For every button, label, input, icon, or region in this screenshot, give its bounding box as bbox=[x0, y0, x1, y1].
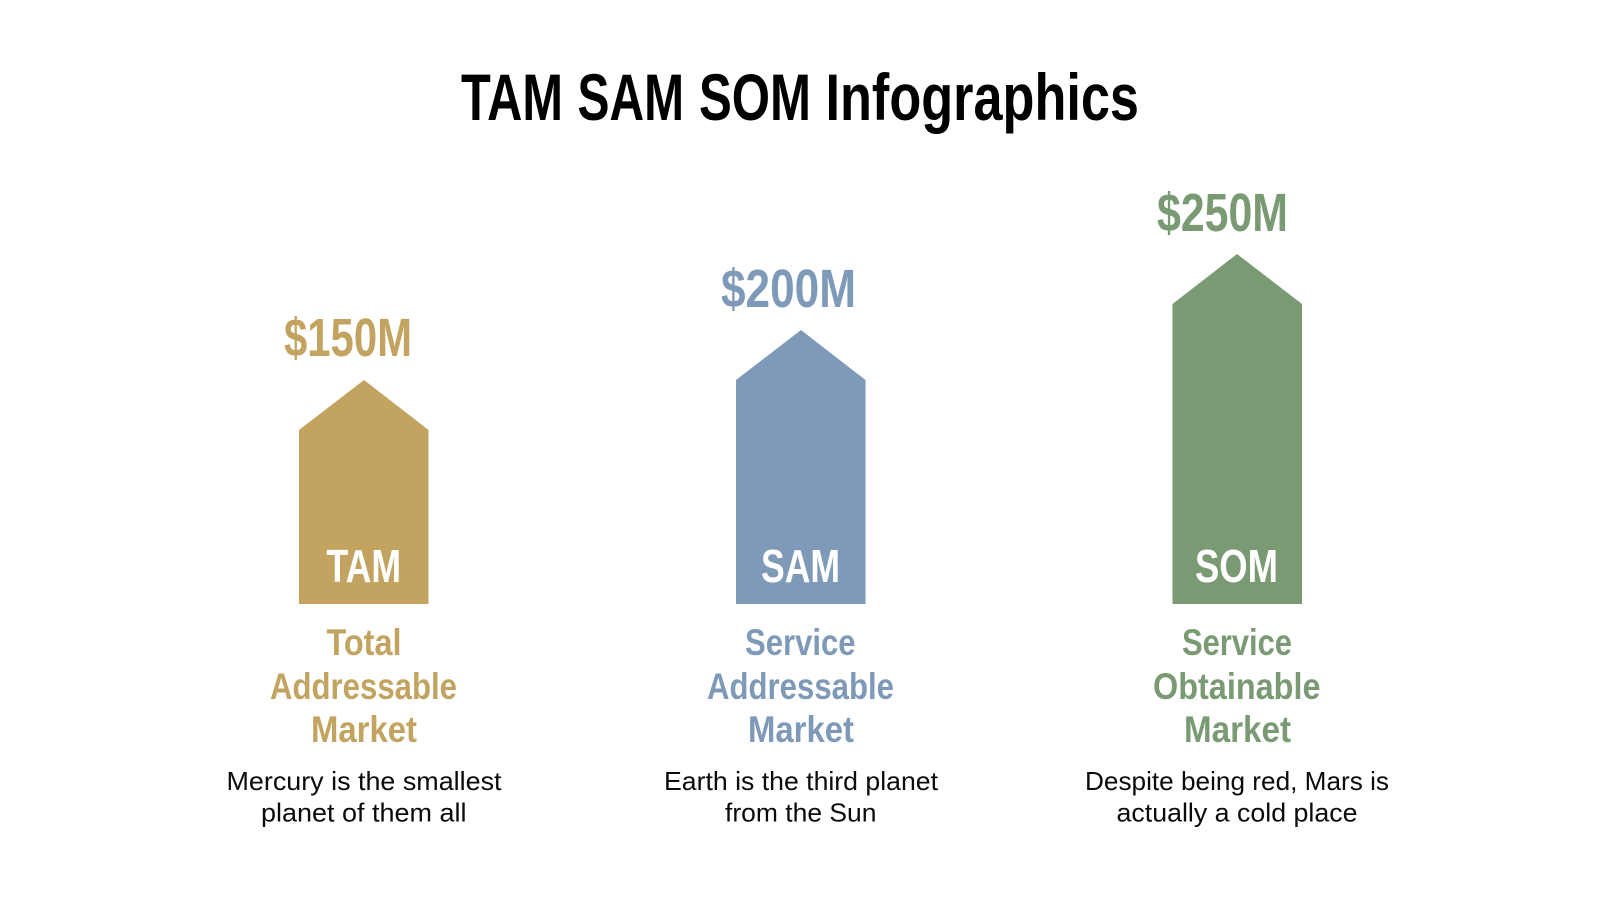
description: SOM: Despite being red, Mars is bbox=[1085, 766, 1389, 796]
bar label: TAM: TAM bbox=[326, 540, 401, 592]
description: TAM: planet of them all bbox=[261, 798, 466, 828]
heading: Service Addressable Market bbox=[707, 622, 894, 750]
title: SOM bbox=[699, 60, 811, 134]
heading: Service Obtainable Market: Market bbox=[1184, 709, 1291, 750]
heading: Service Addressable Market: Service bbox=[745, 622, 856, 663]
title: TAM bbox=[461, 60, 563, 134]
panel: TAM bbox=[226, 308, 502, 828]
arrow bar: SOM bbox=[1172, 254, 1302, 604]
bar label: SOM: SOM bbox=[1195, 540, 1278, 592]
panel: SOM bbox=[1085, 183, 1389, 828]
heading: Total Addressable Market bbox=[270, 622, 457, 750]
panel: SAM bbox=[664, 259, 939, 828]
heading: Service Addressable Market: Addressable bbox=[707, 666, 894, 707]
heading: Service Addressable Market: Market bbox=[748, 709, 854, 750]
value: $250M: $250M bbox=[1157, 183, 1288, 243]
heading: Total Addressable Market: Addressable bbox=[270, 666, 457, 707]
arrow bar: TAM bbox=[299, 380, 428, 604]
heading: Service Obtainable Market bbox=[1153, 622, 1320, 750]
description: SOM bbox=[1085, 766, 1389, 828]
title: SAM bbox=[578, 60, 684, 134]
title bbox=[461, 60, 1139, 134]
heading: Service Obtainable Market: Service bbox=[1182, 622, 1292, 663]
value: $150M: $150M bbox=[284, 308, 412, 368]
heading: Total Addressable Market: Market bbox=[311, 709, 417, 750]
arrow bar: SAM bbox=[736, 330, 866, 604]
description: TAM bbox=[226, 766, 502, 828]
description: SOM: actually a cold place bbox=[1116, 798, 1358, 828]
description: SAM bbox=[664, 766, 939, 828]
description: SAM: Earth is the third planet bbox=[664, 766, 939, 796]
heading: Total Addressable Market: Total bbox=[326, 622, 402, 663]
bar label: SAM: SAM bbox=[761, 540, 840, 592]
value: $200M: $200M bbox=[721, 259, 856, 319]
description: TAM: Mercury is the smallest bbox=[226, 766, 502, 796]
description: SAM: from the Sun bbox=[725, 798, 876, 828]
heading: Service Obtainable Market: Obtainable bbox=[1153, 666, 1320, 707]
title: Infographics bbox=[826, 60, 1139, 134]
